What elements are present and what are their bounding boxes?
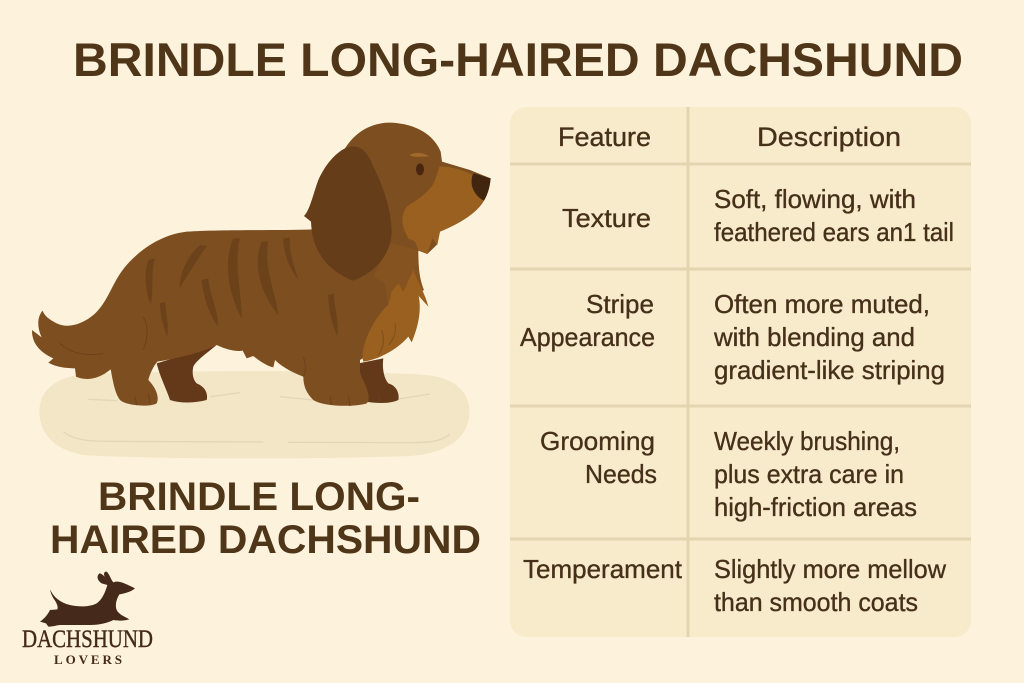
neck fur bbox=[373, 243, 424, 307]
row: grooming needs: Weekly brushing, bbox=[714, 426, 900, 456]
row: stripe appearance: Appearance bbox=[520, 322, 655, 352]
row: stripe appearance: Stripe bbox=[586, 289, 654, 319]
chest fur bbox=[363, 270, 428, 362]
row: grooming needs: high-friction areas bbox=[714, 492, 917, 522]
logo bbox=[22, 572, 153, 667]
nose bbox=[472, 173, 491, 201]
header row bbox=[558, 122, 901, 152]
far legs bbox=[157, 345, 399, 403]
logo: LOVERS bbox=[54, 652, 122, 667]
row: texture: Soft, flowing, with bbox=[714, 184, 916, 214]
row: stripe appearance: with blending and bbox=[713, 322, 915, 352]
table background bbox=[510, 107, 971, 637]
row: texture: Texture bbox=[562, 203, 651, 233]
row: temperament: Slightly more mellow bbox=[714, 554, 946, 584]
row: stripe appearance: Often more muted, bbox=[714, 289, 930, 319]
logo wordmark: DACHSHUND bbox=[22, 626, 153, 653]
muzzle bbox=[402, 167, 484, 254]
eye bbox=[416, 163, 424, 175]
cushion bbox=[39, 371, 469, 458]
header row: Description bbox=[757, 122, 901, 152]
row: grooming needs: Grooming bbox=[540, 426, 655, 456]
subtitle: HAIRED DACHSHUND bbox=[50, 518, 481, 562]
head bbox=[344, 123, 491, 254]
subtitle bbox=[50, 475, 481, 562]
eyebrow bbox=[409, 153, 429, 157]
row: grooming needs: Needs bbox=[585, 459, 657, 489]
ear bbox=[304, 146, 392, 281]
brindle stripes bbox=[146, 238, 338, 337]
row: stripe appearance bbox=[520, 289, 945, 385]
row: grooming needs: plus extra care in bbox=[714, 459, 904, 489]
row: temperament bbox=[523, 554, 946, 617]
title: BRINDLE LONG-HAIRED DACHSHUND bbox=[73, 33, 963, 86]
row: temperament: than smooth coats bbox=[714, 587, 918, 617]
row: grooming needs bbox=[540, 426, 917, 522]
subtitle: BRINDLE LONG- bbox=[98, 475, 420, 519]
header row: Feature bbox=[558, 122, 651, 152]
logo dog bbox=[40, 572, 135, 627]
row: stripe appearance: gradient-like striping bbox=[714, 355, 945, 385]
dog illustration bbox=[32, 123, 491, 458]
row: texture: feathered ears an1 tail bbox=[714, 217, 954, 247]
body and tail bbox=[32, 210, 417, 406]
fur detail lines bbox=[60, 317, 380, 406]
row: texture bbox=[562, 184, 954, 247]
row: temperament: Temperament bbox=[523, 554, 683, 584]
table panel bbox=[510, 107, 971, 637]
